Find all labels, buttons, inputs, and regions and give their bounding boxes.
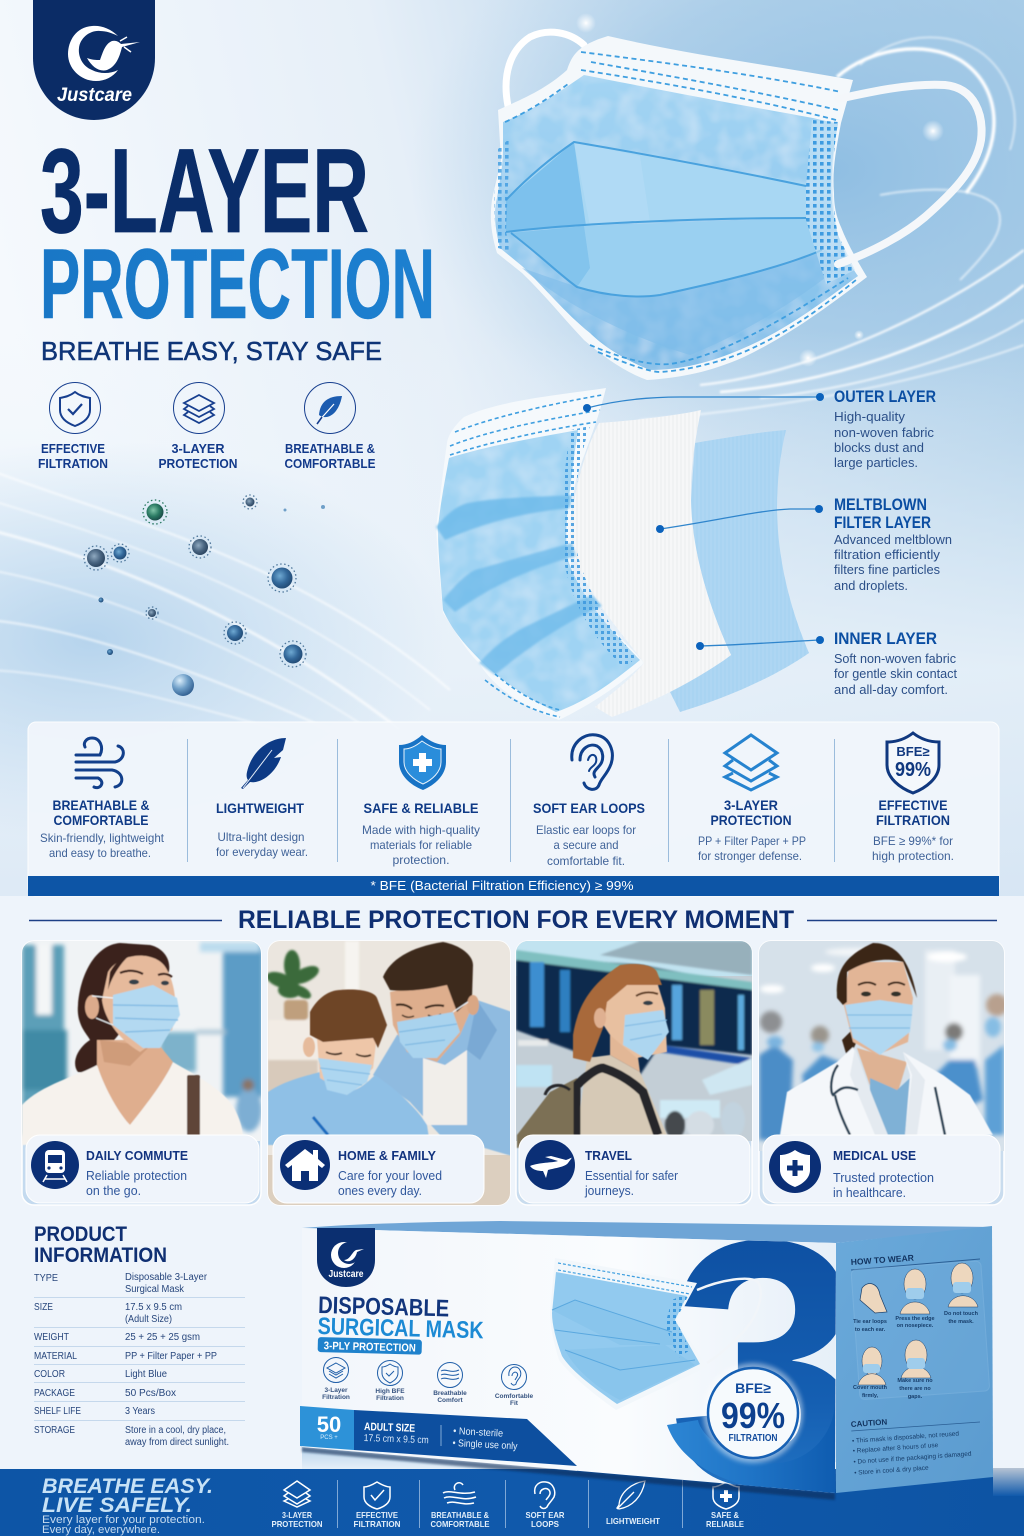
box side panel (836, 1226, 993, 1493)
row: type: Surgical Mask (125, 1284, 185, 1295)
box bottom band: • Single use only (452, 1438, 518, 1452)
caption card: in healthcare. (833, 1185, 906, 1200)
feature: soft ear loops (533, 735, 645, 868)
feature: soft ear loops: Elastic ear loops for (536, 823, 636, 837)
box bottom band: PCS + (320, 1435, 338, 1441)
row: shelf life: 3 Years (125, 1406, 155, 1417)
callout: inner layer: for gentle skin contact (834, 666, 957, 681)
label: breathable and comfortable: COMFORTABLE (284, 456, 376, 471)
callout: outer layer (583, 387, 936, 470)
caution: • This mask is disposable, not reused (852, 1430, 960, 1445)
product box (300, 1221, 993, 1501)
how-to captions: Tie ear loops (853, 1319, 887, 1325)
brand name: Justcare (57, 85, 132, 106)
feature: breathable: BREATHABLE & (52, 797, 150, 813)
box seal: FILTRATION (728, 1433, 778, 1444)
how-to captions: on nosepiece. (897, 1323, 934, 1329)
row: weight (34, 1332, 200, 1343)
footer band (0, 1468, 1024, 1536)
box logo (317, 1228, 375, 1287)
footer: effective: FILTRATION (354, 1519, 400, 1529)
icon: train (31, 1141, 79, 1189)
box icon row: Comfortable (495, 1393, 534, 1400)
icon: medical shield (769, 1141, 821, 1193)
footer: ear: SOFT EAR (526, 1510, 564, 1520)
row: type: TYPE (34, 1273, 58, 1284)
box side panel: HOW TO WEAR (850, 1253, 914, 1267)
row: storage: away from direct sunlight. (125, 1437, 229, 1448)
panel: medical use (759, 941, 1008, 1205)
footer: ear (526, 1482, 564, 1529)
row: size (34, 1302, 182, 1325)
caption card: DAILY COMMUTE (86, 1148, 188, 1163)
callout: meltblown filter layer: filtration efficiently (834, 547, 941, 562)
callout: meltblown filter layer: and droplets. (834, 578, 908, 593)
icon: shield check (50, 382, 100, 434)
caption card (763, 1135, 1000, 1203)
row: size: (Adult Size) (125, 1314, 172, 1325)
feature: lightweight: LIGHTWEIGHT (216, 800, 304, 816)
icon: layers (725, 735, 777, 790)
box seal: 99% (721, 1395, 785, 1436)
row: material (34, 1351, 217, 1362)
slogan (42, 1475, 213, 1536)
icon: ear (572, 735, 612, 789)
mask white border (491, 36, 867, 380)
label: effective filtration: FILTRATION (38, 456, 108, 471)
mask blue fabric (495, 75, 858, 370)
hero mask (491, 32, 982, 380)
box bottom band: 50 (317, 1412, 341, 1437)
caption card: Reliable protection (86, 1168, 187, 1183)
how-to figures (858, 1263, 978, 1385)
panel: features (28, 722, 999, 896)
tagline: BREATHE EASY, STAY SAFE (41, 338, 382, 366)
box pill: 3-PLY PROTECTION (324, 1340, 416, 1355)
row: size: 17.5 x 9.5 cm (125, 1302, 182, 1313)
feature: 3-layer protection: PROTECTION (710, 812, 792, 828)
footer: 3-layer: 3-LAYER (282, 1510, 312, 1520)
footer: breathable: BREATHABLE & (431, 1510, 489, 1520)
feature: lightweight (216, 738, 308, 859)
caution: • Store in cool & dry place (854, 1465, 929, 1477)
box icon: layers (324, 1358, 348, 1382)
slogan: Every day, everywhere. (42, 1524, 160, 1536)
callout: outer layer: OUTER LAYER (834, 387, 936, 406)
panel: daily commute (22, 941, 263, 1205)
caution: • Do not use if the packaging is damaged (853, 1451, 972, 1466)
sparkles (576, 13, 944, 367)
heading: PRODUCT (34, 1223, 127, 1246)
feature: lightweight: Ultra-light design (218, 830, 304, 844)
how-to captions: to each ear. (855, 1327, 886, 1333)
row: shelf life: SHELF LIFE (34, 1406, 81, 1417)
box icon: ear (502, 1364, 526, 1390)
box bottom band: • Non-sterile (453, 1426, 504, 1440)
feature: soft ear loops: a secure and (554, 838, 618, 852)
label: 3-layer protection: PROTECTION (158, 456, 238, 471)
footer: safe: SAFE & (711, 1510, 739, 1520)
feature: safe and reliable: SAFE & RELIABLE (364, 800, 478, 816)
caution: CAUTION (851, 1417, 888, 1429)
box bottom band (300, 1406, 577, 1466)
icon: dove in crescent (68, 26, 140, 81)
feature: effective filtration (872, 733, 954, 863)
feature: breathable: and easy to breathe. (49, 846, 151, 860)
box shadow (302, 1447, 835, 1500)
caption card (519, 1135, 750, 1203)
callout: inner layer: Soft non-woven fabric (834, 651, 956, 666)
icon: BFE shield: 99% (895, 759, 931, 781)
heading (34, 1223, 167, 1267)
callout: inner layer (696, 629, 957, 697)
label: breathable and comfortable: BREATHABLE & (285, 441, 375, 456)
icon: BFE shield (887, 733, 939, 793)
icon row: key benefits (38, 382, 376, 471)
box top face (302, 1221, 993, 1243)
box icon row: 3-Layer (324, 1387, 348, 1394)
footnote bar: * BFE (Bacterial Filtration Efficiency) ≥ 99% (370, 878, 634, 893)
hero background (0, 0, 1024, 896)
caption card: TRAVEL (585, 1148, 632, 1163)
how-to captions (853, 1311, 979, 1400)
caution: • Replace after 8 hours of use (852, 1442, 939, 1455)
label: effective filtration: EFFECTIVE (41, 441, 105, 456)
ear loop right (838, 85, 982, 264)
feature: breathable: Skin-friendly, lightweight (40, 831, 165, 845)
feature: breathable: COMFORTABLE (54, 812, 148, 828)
row: weight: 25 + 25 + 25 gsm (125, 1332, 200, 1343)
feature: soft ear loops: comfortable fit. (547, 854, 625, 868)
icon: wind (76, 738, 123, 788)
box icon row: Comfort (437, 1397, 463, 1404)
feature: safe and reliable: materials for reliable (370, 838, 472, 852)
row: package (34, 1388, 176, 1399)
row: color (34, 1369, 167, 1380)
row: package: PACKAGE (34, 1388, 75, 1399)
row: color: Light Blue (125, 1369, 167, 1380)
caption card: Essential for safer (585, 1168, 679, 1183)
icon: house (280, 1140, 330, 1190)
callout: meltblown filter layer: FILTER LAYER (834, 513, 931, 532)
how-to captions: there are no (899, 1386, 931, 1392)
photo: airport traveller (516, 941, 752, 1148)
row: storage: Store in a cool, dry place, (125, 1425, 226, 1436)
box seal (708, 1368, 798, 1458)
mask pleats (506, 142, 845, 355)
footer: lightweight: LIGHTWEIGHT (606, 1516, 661, 1526)
row: weight: WEIGHT (34, 1332, 69, 1343)
box front face (302, 1228, 836, 1493)
feature: 3-layer protection (698, 735, 806, 863)
callout: outer layer: High-quality (834, 409, 906, 424)
footer: lightweight (606, 1481, 661, 1526)
row: material: MATERIAL (34, 1351, 77, 1362)
callout: inner layer: and all-day comfort. (834, 682, 948, 697)
slogan: LIVE SAFELY. (42, 1494, 192, 1517)
box headline (317, 1292, 485, 1344)
feature: effective filtration: BFE ≥ 99%* for (873, 834, 953, 848)
product information (34, 1223, 245, 1448)
feature: lightweight: for everyday wear. (216, 845, 308, 859)
feature: 3-layer protection: for stronger defense. (698, 849, 802, 863)
how-to captions: firmly, (862, 1393, 879, 1399)
heading: use cases: RELIABLE PROTECTION FOR EVERY MOMENT (238, 906, 794, 934)
icon: shield plus (399, 735, 446, 790)
caption card (26, 1135, 259, 1203)
callout: outer layer: large particles. (834, 455, 918, 470)
panel: home and family (264, 941, 512, 1205)
row: storage: STORAGE (34, 1425, 75, 1436)
how-to captions: Press the edge (895, 1316, 935, 1322)
row: size: SIZE (34, 1302, 53, 1313)
box bottom band: 17.5 cm x 9.5 cm (364, 1433, 429, 1446)
how-to captions: Do not touch (944, 1311, 979, 1317)
icon: layers (174, 382, 224, 434)
photo: woman commuter (22, 941, 263, 1145)
feature: 3-layer protection: PP + Filter Paper + PP (698, 834, 806, 848)
title: 3-LAYER (40, 124, 369, 258)
footer: effective: EFFECTIVE (356, 1510, 398, 1520)
title (40, 124, 435, 339)
photo: doctor (759, 941, 1008, 1151)
label: 3-layer protection (158, 441, 238, 471)
box icon row: Filtration (376, 1395, 404, 1402)
caption card: ones every day. (338, 1183, 422, 1198)
row: shelf life (34, 1406, 155, 1417)
feature: safe and reliable (362, 735, 480, 867)
feature: breathable (40, 738, 165, 860)
box mask (550, 1258, 761, 1410)
row: type: Disposable 3-Layer (125, 1272, 208, 1283)
feature: soft ear loops: SOFT EAR LOOPS (533, 800, 645, 816)
feature: 3-layer protection: 3-LAYER (724, 797, 778, 813)
title: PROTECTION (40, 228, 435, 339)
callout: outer layer: non-woven fabric (834, 425, 935, 440)
back layer (669, 430, 809, 712)
callout: outer layer: blocks dust and (834, 440, 924, 455)
slogan: BREATHE EASY. (42, 1475, 213, 1498)
photo: father and son (264, 941, 512, 1205)
box floor reflection (302, 1447, 577, 1471)
box headline: SURGICAL MASK (317, 1313, 484, 1344)
how-to captions: the mask. (948, 1319, 974, 1325)
mask stitching (505, 52, 856, 372)
footer: ear: LOOPS (531, 1519, 559, 1529)
caption card: Care for your loved (338, 1168, 442, 1183)
heading: INFORMATION (34, 1244, 167, 1267)
box seal: BFE≥ (735, 1380, 771, 1396)
feature: effective filtration: FILTRATION (876, 812, 950, 828)
caption card: HOME & FAMILY (338, 1148, 436, 1163)
feature: effective filtration: EFFECTIVE (878, 797, 948, 813)
footer: safe: RELIABLE (706, 1519, 744, 1529)
caption card: MEDICAL USE (833, 1148, 916, 1163)
callout: meltblown filter layer: MELTBLOWN (834, 495, 927, 514)
panel: travel (516, 941, 752, 1205)
box icon row: Filtration (322, 1394, 350, 1401)
row: storage (34, 1425, 229, 1448)
brand logo badge (33, 0, 155, 120)
row: package: 50 Pcs/Box (125, 1388, 176, 1399)
feature: effective filtration: high protection. (872, 849, 954, 863)
box bottom band: ADULT SIZE (364, 1421, 415, 1435)
box graphic: big numeral (667, 1240, 836, 1493)
icon: BFE shield: BFE≥ (896, 744, 930, 759)
caution (851, 1411, 983, 1477)
callout: meltblown filter layer: Advanced meltblown (834, 532, 952, 547)
box icon row: Fit (510, 1400, 519, 1407)
box icon row (322, 1358, 534, 1407)
particles: viruses (84, 495, 325, 696)
row: material: PP + Filter Paper + PP (125, 1351, 217, 1362)
box icon row: High BFE (375, 1388, 405, 1395)
footer: 3-layer (272, 1481, 322, 1529)
outer layer (436, 388, 644, 720)
icon: leaf (304, 382, 356, 434)
box icon: air (438, 1362, 462, 1388)
callout: inner layer: INNER LAYER (834, 629, 937, 648)
caption card: Trusted protection (833, 1170, 934, 1185)
slogan: Every layer for your protection. (42, 1514, 205, 1526)
footer: breathable: COMFORTABLE (430, 1519, 490, 1529)
meltblown layer (570, 410, 731, 717)
row: color: COLOR (34, 1369, 65, 1380)
footer: breathable (430, 1483, 490, 1529)
footer: effective (354, 1482, 400, 1529)
caption card (273, 1135, 484, 1203)
caption card: journeys. (584, 1183, 634, 1198)
label: effective filtration (38, 441, 108, 471)
exploded mask layers (436, 388, 809, 720)
label: 3-layer protection: 3-LAYER (172, 441, 225, 456)
icon: plane (525, 1140, 575, 1190)
mask side seams (806, 120, 855, 284)
footer: 3-layer: PROTECTION (272, 1519, 322, 1529)
feature: safe and reliable: protection. (392, 853, 450, 867)
label: breathable and comfortable (284, 441, 376, 471)
how-to captions: Make sure no (897, 1378, 933, 1384)
ear loop left (506, 32, 584, 106)
how-to captions: Cover mouth (853, 1385, 888, 1391)
box icon: shield (378, 1360, 402, 1386)
footnote bar (28, 876, 999, 896)
footer: safe (706, 1482, 744, 1529)
callout: meltblown filter layer (656, 495, 952, 593)
icon: feather (241, 738, 286, 789)
row: type (34, 1272, 208, 1295)
box headline: DISPOSABLE (318, 1292, 450, 1322)
caption card: on the go. (86, 1183, 141, 1198)
feature: safe and reliable: Made with high-quality (362, 823, 480, 837)
box logo: Justcare (328, 1269, 364, 1280)
box icon row: Breathable (433, 1390, 467, 1397)
callout: meltblown filter layer: filters fine particles (834, 562, 940, 577)
how-to captions: gaps. (908, 1394, 923, 1400)
